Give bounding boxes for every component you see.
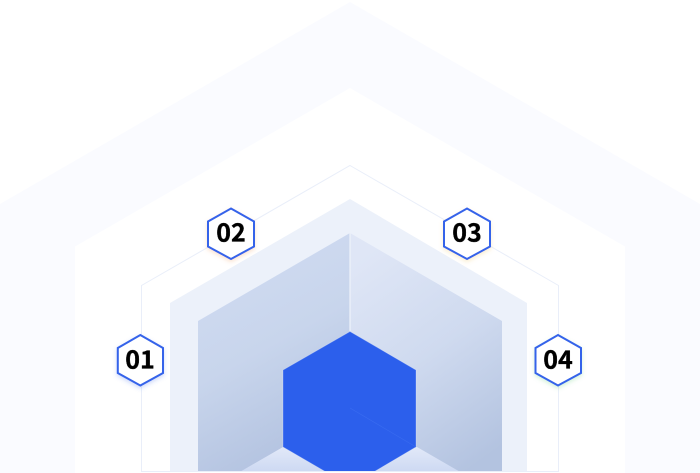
central blue hexagon [283,332,416,473]
bottom light face [242,447,458,471]
inner white hexagon [75,88,625,473]
left shaded face [198,233,350,473]
right shaded face [350,233,502,473]
badge 04 [536,335,581,386]
badge 02: 02 [216,214,246,250]
badge 03: 03 [452,214,482,250]
central divider line [349,233,350,331]
stacked inner hexagon group [170,199,527,473]
badge 01 [118,335,163,386]
badge 02 [208,208,254,259]
badge 04: 04 [543,340,573,376]
badge 01: 01 [125,340,155,376]
light blue hexagon band [170,199,527,473]
thin outline hexagon [142,166,558,472]
badge 03 [444,208,490,259]
